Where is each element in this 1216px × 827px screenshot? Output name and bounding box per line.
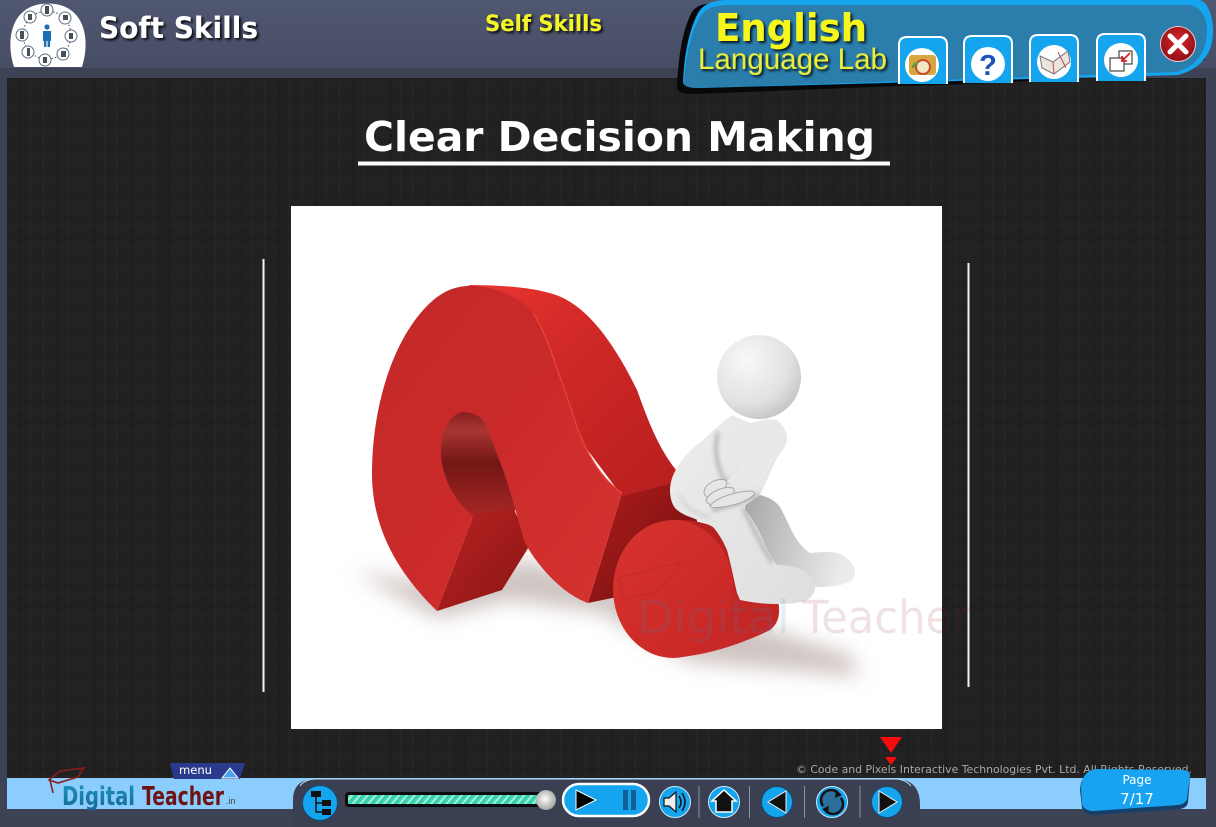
red question mark: [372, 285, 779, 658]
menu tab: [170, 763, 245, 779]
white thinking figure: [670, 335, 855, 604]
course logo: person surrounded by skill icons: [10, 4, 86, 67]
cylinder base side: [676, 520, 779, 657]
play and pause control: [563, 784, 649, 816]
media control bar: [293, 779, 920, 827]
white picture panel: [291, 206, 942, 729]
menu tab: menu: [179, 763, 212, 777]
icon: help question mark tab: [964, 36, 1012, 83]
page counter badge: 7/17: [1120, 790, 1154, 808]
icon: topic tree button: [302, 786, 338, 820]
icon: speaker button: [660, 786, 690, 818]
Digital Teacher logo: Digital: [62, 782, 135, 812]
soft body shading: [680, 432, 772, 562]
ground shadow: [355, 560, 860, 676]
bottom light blue band: [7, 778, 1206, 809]
Digital Teacher logo: .in: [226, 796, 236, 806]
icon: previous button: [762, 786, 792, 818]
icon: close button: [1160, 26, 1196, 62]
far leg: [745, 495, 855, 587]
question mark front face: [372, 286, 622, 611]
cylinder base face: [613, 520, 733, 658]
Digital Teacher logo: Teacher: [142, 782, 224, 812]
question mark lower right facet: [588, 478, 700, 603]
clasped hands: [704, 480, 754, 508]
question mark lower left facet: [437, 507, 530, 611]
faint watermark logo: [618, 562, 970, 644]
icon: help question mark tab: ?: [979, 50, 997, 82]
icon: folder with clock tab: [899, 37, 947, 84]
left vertical rule: [262, 259, 264, 692]
copyright notice: © Code and Pixels Interactive Technologies Pvt. Ltd. All Rights Reserved.: [796, 764, 1192, 776]
icon: open book tab: [1030, 35, 1078, 82]
course title: Soft Skills: [99, 11, 258, 45]
forearm and fist on chin: [727, 419, 787, 487]
red page marker arrows: [880, 737, 902, 765]
faint watermark logo: Teacher: [801, 591, 970, 644]
English Language Lab toolbar panel: [677, 0, 1213, 94]
icon: replay button: [816, 786, 848, 818]
Language Lab heading: Language Lab: [698, 43, 887, 76]
icon: resize window tab: [1097, 34, 1145, 81]
progress bar: [345, 790, 556, 810]
faint watermark logo: Digital: [637, 591, 790, 644]
torso and near leg: [670, 415, 815, 604]
highlight along front face edge: [533, 313, 622, 493]
icon: home button: [708, 786, 740, 818]
slide heading: Clear Decision Making: [364, 113, 875, 161]
question mark hole interior: [437, 408, 518, 518]
Digital Teacher logo: [49, 768, 236, 812]
question mark top side: [468, 285, 685, 496]
header bar: [0, 0, 1216, 68]
illustration: thinking figure on red question mark: [291, 206, 970, 729]
icon: next button: [872, 786, 902, 818]
page counter badge: [1080, 769, 1190, 815]
right vertical rule: [968, 263, 970, 687]
section title: Self Skills: [485, 12, 602, 37]
English heading: English: [715, 6, 867, 50]
head: [717, 335, 801, 419]
page counter badge: Page: [1122, 773, 1152, 787]
